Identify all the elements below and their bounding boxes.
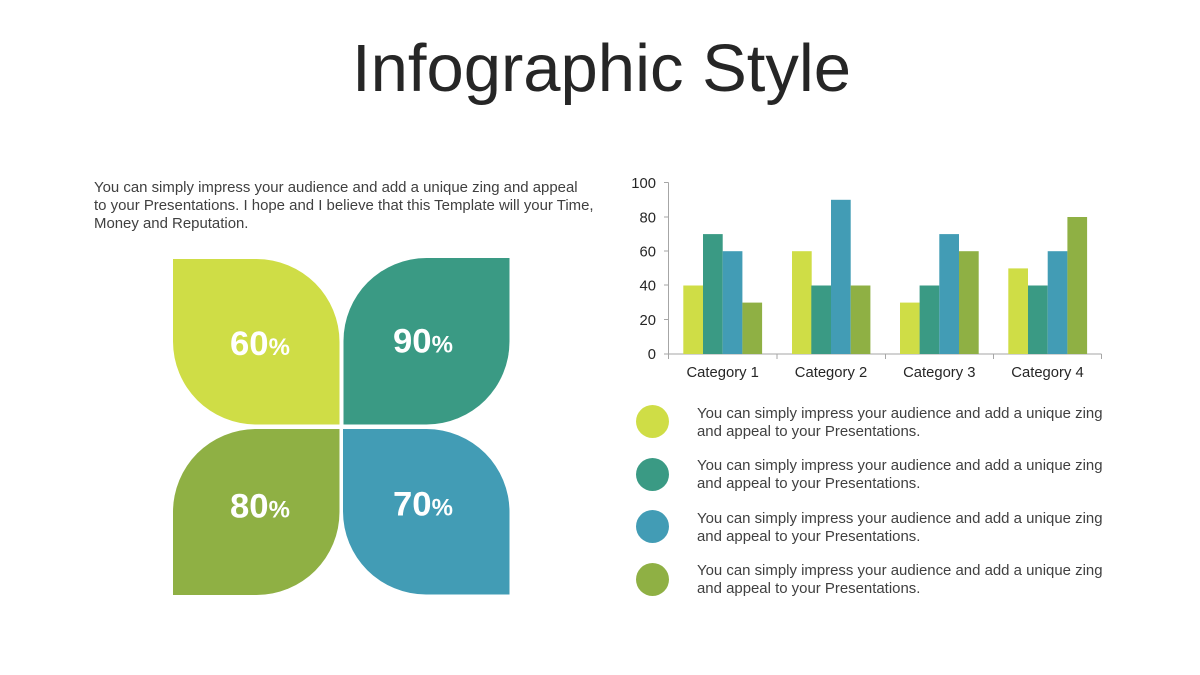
icon: lime circle	[636, 405, 669, 438]
leaf: 90%	[344, 258, 510, 424]
bars: category 2	[792, 200, 870, 354]
x-axis labels: Category 4	[1011, 365, 1084, 381]
legend text 4: and appeal to your Presentations.	[697, 580, 920, 597]
legend text 3: and appeal to your Presentations.	[697, 528, 920, 545]
y-axis labels	[631, 176, 656, 363]
legend item 1	[636, 405, 1103, 440]
icon: teal circle	[636, 458, 669, 490]
leaf: 70%	[343, 429, 510, 594]
x-axis labels	[687, 365, 1084, 381]
leaf: 80%: 80%	[230, 488, 290, 526]
leaf: 90%: 90%	[393, 322, 453, 360]
y-axis labels: 80	[640, 210, 656, 226]
bars: category 3	[900, 234, 979, 354]
legend text 1	[697, 405, 1103, 440]
x-axis labels: Category 1	[687, 365, 759, 381]
intro text block: to your Presentations. I hope and I believe that this Template will your Time,	[94, 197, 594, 214]
icon: green circle	[636, 562, 669, 596]
leaf: 70%: 70%	[393, 486, 453, 524]
leaf: 60%: 60%	[230, 325, 290, 363]
y-axis labels: 20	[640, 313, 656, 329]
y-axis labels: 100	[631, 176, 656, 192]
legend text 2: You can simply impress your audience and add a unique zing	[697, 457, 1103, 474]
legend item 4	[636, 562, 1103, 597]
legend text 4	[697, 562, 1103, 597]
bars: category 4	[1008, 217, 1087, 354]
icon: blue circle	[636, 510, 669, 543]
legend text 1: You can simply impress your audience and add a unique zing	[697, 405, 1103, 422]
intro text block: You can simply impress your audience and add a unique zing and appeal	[94, 179, 578, 196]
x-axis labels: Category 3	[903, 365, 975, 381]
legend item 3	[636, 510, 1103, 545]
bars: category 1	[683, 234, 762, 354]
chart axes	[664, 182, 1102, 359]
x-axis labels: Category 2	[795, 365, 867, 381]
legend text 3	[697, 510, 1103, 545]
legend text 2	[697, 457, 1103, 492]
legend text 3: You can simply impress your audience and add a unique zing	[697, 510, 1103, 527]
leaf: 60%	[173, 259, 340, 424]
y-axis labels: 0	[648, 347, 656, 363]
title: Infographic Style	[352, 31, 851, 106]
legend item 2	[636, 457, 1103, 492]
legend text 1: and appeal to your Presentations.	[697, 423, 920, 440]
legend text 4: You can simply impress your audience and add a unique zing	[697, 562, 1103, 579]
intro text block: Money and Reputation.	[94, 215, 248, 232]
legend text 2: and appeal to your Presentations.	[697, 475, 920, 492]
intro text block	[94, 179, 594, 232]
y-axis labels: 40	[640, 278, 656, 294]
y-axis labels: 60	[640, 244, 656, 260]
leaf: 80%	[173, 429, 340, 595]
